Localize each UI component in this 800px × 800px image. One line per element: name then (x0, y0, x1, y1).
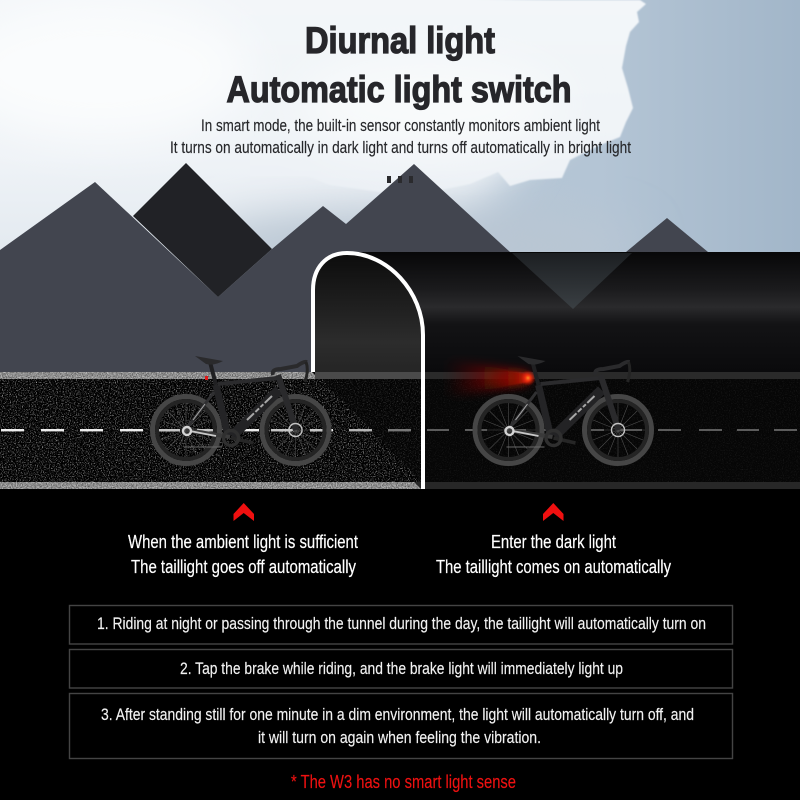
right caption (436, 532, 671, 577)
lit kerbs (0, 372, 422, 489)
note box 1 (70, 606, 732, 644)
note box 2 (70, 650, 732, 688)
right caption: The taillight comes on automatically (436, 557, 671, 577)
tunnel body (313, 252, 800, 372)
road base right (0, 372, 800, 489)
title: Automatic light switch (226, 69, 572, 110)
subtitle: It turns on automatically in dark light and turns off automatically in bright light (170, 138, 631, 157)
reflected mountain triangle (512, 253, 632, 309)
taillight glow (445, 359, 536, 397)
title (226, 20, 572, 110)
left caption: When the ambient light is sufficient (128, 532, 358, 552)
title: Diurnal light (305, 20, 495, 61)
cloud (240, 0, 646, 192)
note box 3: it will turn on again when feeling the vibration. (258, 728, 541, 747)
left chevron icon (234, 503, 254, 521)
left caption: The taillight goes off automatically (131, 557, 356, 577)
bottom kerb dark (315, 482, 800, 489)
black lower panel (0, 489, 800, 800)
sky background (0, 0, 800, 300)
three dots marker (387, 176, 413, 183)
subtitle: In smart mode, the built-in sensor constantly monitors ambient light (201, 116, 600, 135)
dark mountain (133, 163, 272, 297)
footnote: * The W3 has no smart light sense (291, 771, 516, 792)
right caption: Enter the dark light (491, 532, 616, 552)
grey mountains and hillside (0, 164, 708, 372)
road (0, 372, 800, 489)
lit road surface (0, 379, 425, 482)
note box 3 (70, 694, 732, 758)
blue haze behind mountains (200, 207, 640, 283)
bike: daylight, taillight off (152, 356, 329, 464)
note box 2: 2. Tap the brake while riding, and the brake light will immediately light up (180, 659, 623, 678)
bike: dark, taillight on (445, 356, 652, 464)
lane dashes (1, 429, 797, 431)
left caption (128, 532, 358, 577)
mountains (0, 163, 708, 372)
tunnel arch interior (313, 253, 423, 372)
subtitle (170, 116, 631, 157)
taillight off (205, 376, 208, 380)
right chevron icon (543, 503, 564, 521)
tunnel arch outline (313, 253, 423, 489)
top kerb dark (315, 372, 800, 379)
pale haze left side (0, 0, 520, 300)
